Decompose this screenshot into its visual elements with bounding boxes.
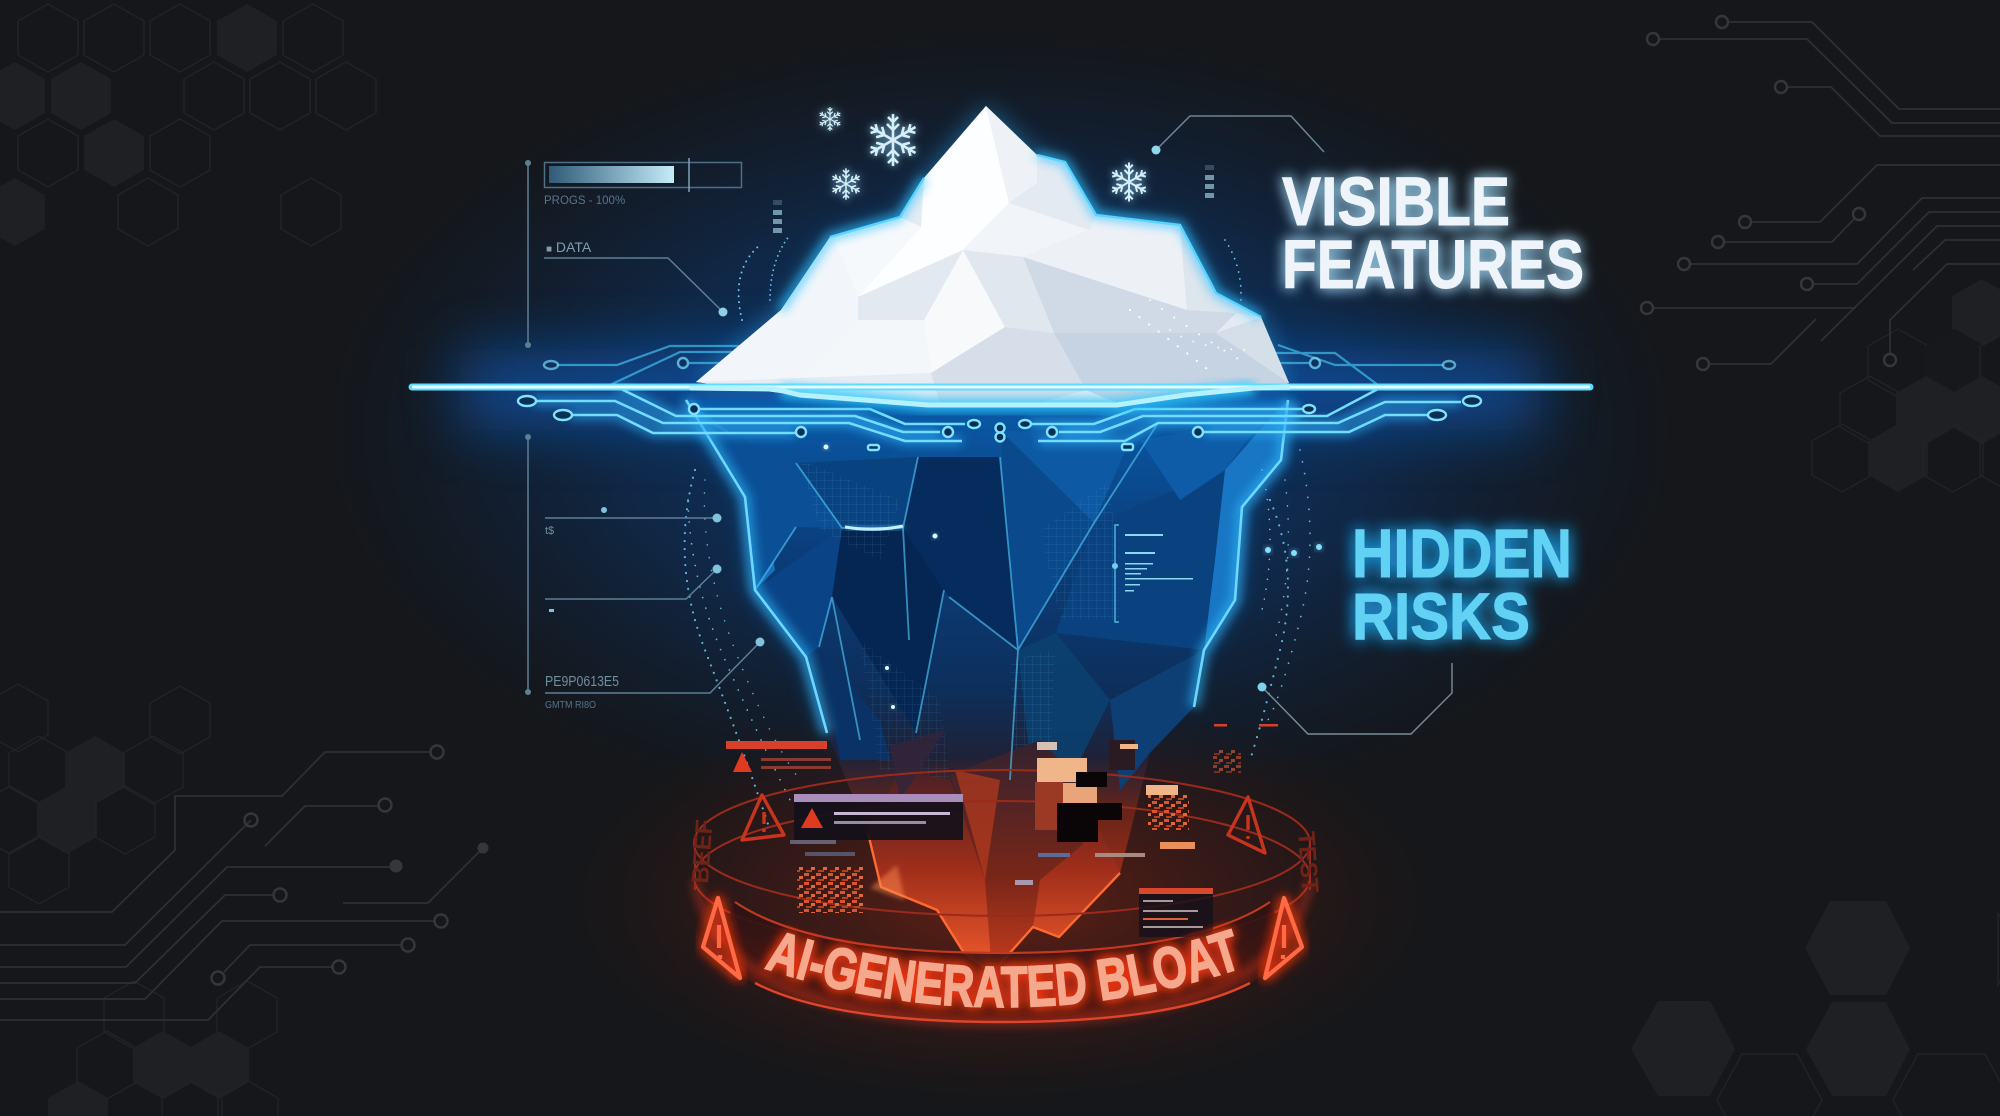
ring front band bbox=[715, 902, 1290, 1022]
surface sparkle bbox=[1130, 300, 1250, 375]
progress bar bbox=[544, 158, 742, 192]
HUD data block inside iceberg bbox=[1112, 525, 1193, 622]
HUD level bars bbox=[773, 165, 1214, 233]
facets bbox=[696, 106, 1289, 403]
iceberg body bbox=[686, 400, 1288, 973]
warning triangle: front left bbox=[703, 898, 740, 978]
base bbox=[696, 106, 1289, 403]
circuit below waterline bbox=[518, 387, 1481, 450]
underwater iceberg bbox=[686, 400, 1288, 973]
glitch window: code bbox=[1139, 750, 1241, 937]
label: pe9p: PE9P0613E5 bbox=[545, 674, 619, 690]
label: gmtm: GMTM RI8O bbox=[545, 699, 596, 711]
ring title: AI-generated bloat: AI-GENERATED BLOAT bbox=[756, 919, 1244, 1017]
circuit above waterline bbox=[544, 345, 1455, 385]
ice edge glow bbox=[1037, 155, 1261, 317]
glitch pixel blocks bbox=[1015, 740, 1195, 885]
data dust particles bbox=[685, 235, 1310, 830]
hexagon pattern: bottom left bbox=[0, 684, 278, 1116]
circuit traces: top right bbox=[1641, 16, 2000, 370]
heading: visible features: FEATURES bbox=[1282, 226, 1584, 303]
callout leader: hidden risks bbox=[1214, 663, 1452, 734]
hexagon pattern: right bbox=[1812, 279, 2000, 492]
small label: t$ bbox=[545, 525, 554, 537]
heading: hidden risks: HIDDEN bbox=[1352, 515, 1572, 592]
circuit traces: bottom left bbox=[0, 746, 488, 1020]
glow behind iceberg bbox=[686, 106, 1289, 733]
ring side labels: BEEF bbox=[687, 819, 718, 884]
HUD panel: top left progress and data bbox=[525, 158, 742, 348]
snowflakes bbox=[818, 107, 1148, 202]
ring back ellipses bbox=[694, 770, 1310, 953]
hexagon pattern: top left bbox=[0, 4, 376, 246]
progress label: PROGS - 100% bbox=[544, 195, 625, 207]
iceberg edges bbox=[755, 423, 1158, 780]
warning triangle: back right bbox=[1228, 797, 1265, 853]
heading: hidden risks: RISKS bbox=[1352, 579, 1530, 653]
glitch noise: left blocks bbox=[790, 840, 864, 913]
glitch window: red alert bbox=[726, 741, 831, 772]
heading: visible features: VISIBLE bbox=[1282, 163, 1510, 240]
ring side labels bbox=[687, 819, 1323, 894]
glowing dots bbox=[824, 444, 1322, 709]
ring side labels: TEST bbox=[1292, 831, 1323, 894]
waterline bbox=[412, 387, 1590, 405]
iceberg facets bbox=[686, 400, 1288, 973]
red holographic ring bbox=[694, 770, 1310, 1022]
warning triangle: back left bbox=[742, 795, 784, 840]
callout leader: visible features bbox=[1152, 116, 1324, 154]
data label: ■ DATA bbox=[546, 239, 592, 255]
hexagon pattern: bottom right bbox=[1631, 901, 2000, 1116]
HUD panel: lower left leaders bbox=[525, 434, 764, 711]
white iceberg tip bbox=[696, 106, 1289, 403]
data leader bbox=[544, 258, 723, 312]
glitch dialog: warning bbox=[794, 794, 963, 840]
warning triangle: front right bbox=[1265, 898, 1302, 978]
